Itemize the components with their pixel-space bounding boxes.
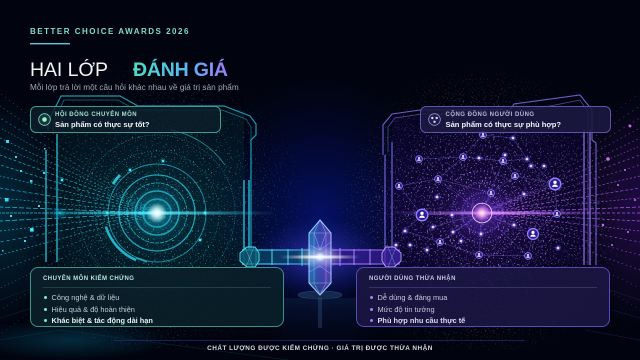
label: HỘI ĐỒNG CHUYÊN MÔN [55, 112, 137, 118]
floor reflection [283, 298, 357, 348]
panel: expert council header [30, 106, 221, 133]
floor lines [0, 285, 288, 360]
bullet list: Phù hợp nhu cầu thực tế [378, 316, 465, 325]
right network [399, 135, 557, 256]
right data streams [482, 93, 640, 310]
footer tagline: CHẤT LƯỢNG ĐƯỢC KIỂM CHỨNG · GIÁ TRỊ ĐƯỢC THỪA NHẬN [207, 345, 433, 352]
question: Sản phẩm có thực sự tốt? [55, 120, 150, 128]
crystal [280, 220, 360, 299]
bullet list: Dễ dùng & đáng mua [378, 293, 447, 302]
icon: three dots [428, 113, 441, 126]
panel: user recognition [356, 267, 610, 327]
left radial target [79, 130, 235, 291]
title [30, 58, 228, 81]
subtitle: Mỗi lớp trả lời một câu hỏi khác nhau về giá trị sản phẩm [30, 83, 239, 92]
bullet list [370, 293, 466, 325]
eyebrow: BETTER CHOICE AWARDS 2026 [30, 27, 190, 36]
question: Sản phẩm có thực sự phù hợp? [446, 120, 561, 128]
panel: expert verification [30, 267, 284, 327]
left data streams [0, 93, 157, 335]
panel: community header [420, 106, 611, 133]
title: HAI LỚP [30, 58, 108, 81]
title: ĐÁNH GIÁ [133, 58, 228, 81]
label: CỘNG ĐỒNG NGƯỜI DÙNG [446, 112, 535, 118]
heading: NGƯỜI DÙNG THỪA NHẬN [369, 276, 456, 282]
accent bar [30, 43, 70, 44]
bullet list: Hiệu quả & độ hoàn thiện [52, 304, 135, 314]
icon: target [38, 113, 51, 126]
speckle: left [0, 60, 320, 350]
bullet list: Mức độ tin tưởng [378, 304, 435, 314]
connector pipes [240, 217, 401, 297]
bullet list: Công nghệ & dữ liệu [52, 293, 119, 302]
speckle: right [330, 60, 640, 350]
bullet list [44, 293, 153, 325]
left frame [46, 96, 256, 265]
footer rule [115, 340, 525, 341]
right frame [383, 95, 596, 265]
bullet list: Khác biệt & tác động dài hạn [52, 316, 153, 325]
heading: CHUYÊN MÔN KIỂM CHỨNG [43, 276, 134, 282]
